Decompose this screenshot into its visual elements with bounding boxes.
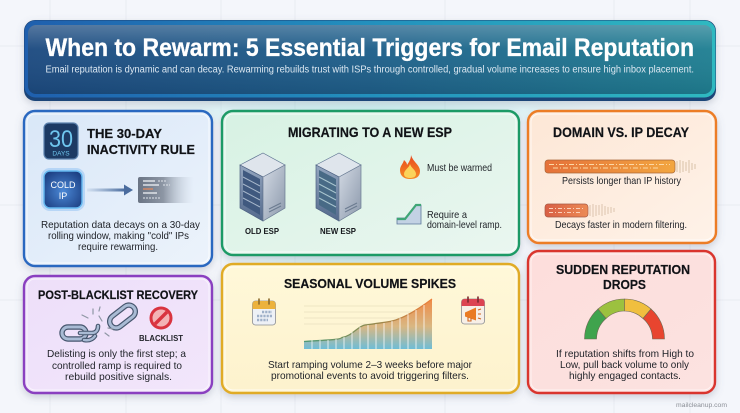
- panel: sudden reputation drops: [528, 251, 715, 393]
- icon: 30 days: [44, 123, 78, 159]
- icon: cold IP: COLD: [50, 180, 76, 190]
- body text: Start ramping volume 2–3 weeks before major: [268, 360, 473, 371]
- subtitle: Email reputation is dynamic and can decay. Rewarming rebuilds trust with ISPs through controlled, gradual volume increases to ensure high inbox placement.: [46, 65, 694, 76]
- body text: [47, 349, 186, 383]
- IP decay bar: [545, 204, 614, 217]
- icon: 30 days: DAYS: [52, 150, 70, 158]
- icon: 30 days: 30: [49, 126, 73, 153]
- heading: POST-BLACKLIST RECOVERY: [38, 289, 198, 302]
- body text: controlled ramp is required to: [52, 361, 182, 372]
- body text: rolling window, making "cold" IPs: [48, 231, 189, 242]
- icon: new server: [316, 153, 361, 221]
- icon: calendar: [252, 299, 276, 325]
- heading: MIGRATING TO A NEW ESP: [288, 125, 452, 140]
- IP text: Decays faster in modern filtering.: [555, 220, 687, 231]
- body text: Low, pull back volume to only: [560, 360, 690, 371]
- domain text: Persists longer than IP history: [562, 176, 682, 187]
- icon: cold IP: [41, 168, 85, 211]
- old ESP label: OLD ESP: [245, 226, 279, 236]
- new ESP label: NEW ESP: [320, 226, 356, 236]
- arrow: [87, 184, 133, 196]
- icon: flame: [400, 155, 420, 179]
- domain decay bar: [545, 160, 695, 173]
- ramp text: Require a: [427, 210, 467, 221]
- body text: highly engaged contacts.: [569, 371, 681, 382]
- must be warmed text: Must be warmed: [427, 163, 492, 174]
- panel: post-blacklist recovery: [24, 276, 212, 393]
- icon: cold IP: IP: [59, 191, 67, 201]
- decaying data block: [138, 177, 194, 203]
- body text: rebuild positive signals.: [65, 372, 172, 383]
- gauge: [584, 299, 664, 339]
- ramp text: domain-level ramp.: [427, 220, 502, 231]
- icon: blacklist stop: [151, 308, 171, 328]
- body text: [268, 360, 473, 382]
- body text: Reputation data decays on a 30-day: [41, 220, 201, 231]
- body text: promotional events to avoid triggering filters.: [271, 371, 469, 382]
- title: When to Rewarm: 5 Essential Triggers for Email Reputation: [46, 35, 694, 62]
- ramp text: [427, 210, 502, 231]
- heading: [87, 126, 195, 157]
- blacklist label: BLACKLIST: [139, 334, 183, 343]
- chart: volume ramp: [304, 299, 432, 349]
- body text: Delisting is only the first step; a: [47, 349, 186, 360]
- icon: calendar with megaphone: [462, 297, 484, 324]
- heading: DOMAIN VS. IP DECAY: [553, 125, 689, 140]
- heading: INACTIVITY RULE: [87, 142, 195, 157]
- heading: DROPS: [603, 277, 646, 292]
- panel: migrating to a new ESP: [222, 111, 519, 255]
- heading: [556, 262, 690, 292]
- heading: THE 30-DAY: [87, 126, 162, 141]
- panel: domain vs IP decay: [528, 111, 716, 243]
- watermark: mailcleanup.com: [676, 402, 727, 409]
- icon: ramp: [397, 205, 421, 224]
- body text: [556, 349, 694, 382]
- header banner: [24, 20, 716, 101]
- heading: SUDDEN REPUTATION: [556, 262, 690, 277]
- heading: SEASONAL VOLUME SPIKES: [284, 276, 456, 291]
- body text: require rewarming.: [78, 242, 158, 253]
- icon: broken chain: [62, 302, 138, 340]
- icon: old server: [240, 153, 285, 221]
- panel: the 30-day inactivity rule: [24, 111, 212, 266]
- body text: [41, 220, 201, 253]
- body text: If reputation shifts from High to: [556, 349, 694, 360]
- panel: seasonal volume spikes: [222, 264, 519, 393]
